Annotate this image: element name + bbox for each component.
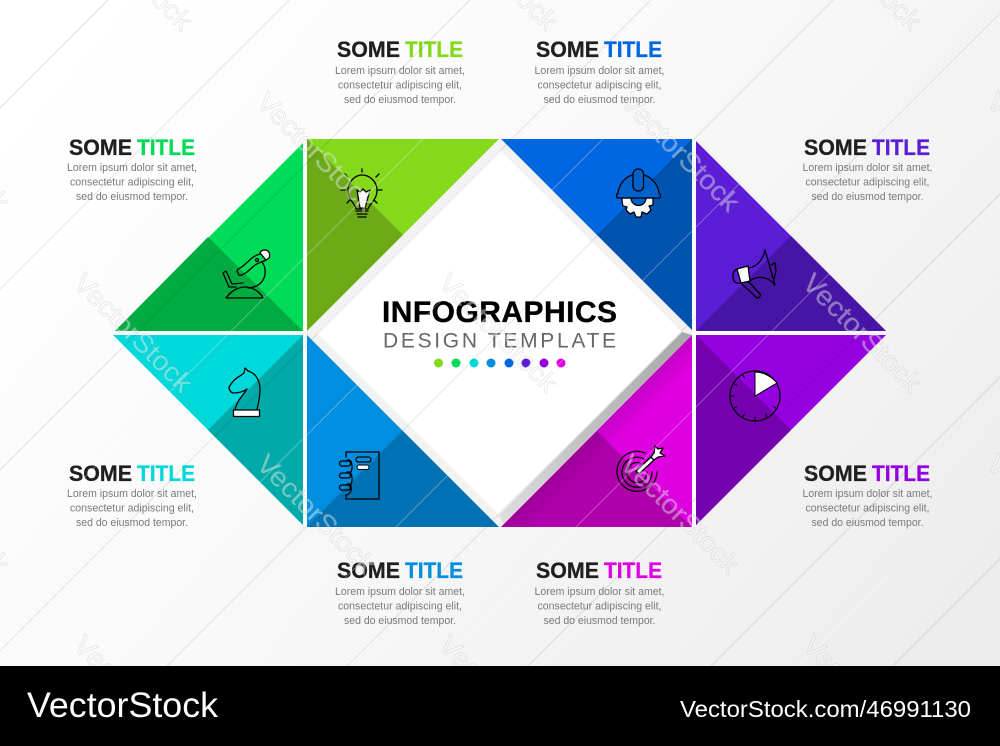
text: lime title: SOME [337, 37, 400, 62]
icon: megaphone [733, 250, 776, 298]
watermark text: VectorStock [433, 268, 564, 399]
text: magenta title: TITLE [604, 558, 662, 583]
text: lime title: sed do eiusmod tempor. [344, 94, 456, 106]
text: violet title: SOME [804, 461, 867, 486]
text: magenta title [534, 558, 665, 627]
text: magenta title: Lorem ipsum dolor sit amet, [534, 586, 665, 598]
text: sky blue title: SOME [337, 558, 400, 583]
text: green title: Lorem ipsum dolor sit amet, [67, 162, 197, 174]
panel: sky blue triangle [307, 335, 499, 527]
text: teal title: Lorem ipsum dolor sit amet, [67, 488, 197, 500]
text: magenta title: SOME [536, 558, 599, 583]
text: green title: consectetur adipiscing elit, [70, 176, 194, 188]
text: green title: TITLE [137, 135, 195, 160]
watermark text: VectorStock [615, 449, 746, 580]
text: indigo title [802, 135, 933, 203]
icon: chess knight [229, 368, 260, 416]
text: violet title: sed do eiusmod tempor. [812, 517, 924, 529]
text: teal title: consectetur adipiscing elit, [70, 502, 194, 514]
text: teal title: SOME [69, 461, 132, 486]
text: violet title: consectetur adipiscing elit, [806, 502, 930, 514]
text: sky blue title: Lorem ipsum dolor sit amet, [335, 586, 465, 598]
watermark text: VectorStock [797, 268, 928, 399]
centre heading [382, 296, 617, 352]
text: violet title [802, 461, 933, 529]
colour dots [434, 358, 566, 368]
panel: indigo triangle [696, 141, 886, 331]
text: sky blue title: sed do eiusmod tempor. [344, 615, 456, 627]
text: royal blue title: TITLE [604, 37, 662, 62]
panel: royal blue triangle [501, 139, 692, 331]
text: magenta title: consectetur adipiscing elit, [538, 600, 662, 612]
icon: microscope [223, 250, 270, 298]
watermark text: VectorStock [615, 87, 746, 218]
icon: light bulb [341, 169, 382, 217]
footer bar [0, 666, 1000, 746]
text: magenta title: sed do eiusmod tempor. [544, 615, 656, 627]
centre heading: INFOGRAPHICS [382, 296, 617, 329]
text: lime title [335, 37, 465, 106]
text: royal blue title: Lorem ipsum dolor sit amet, [534, 65, 665, 77]
footer bar: VectorStock.com/46991130 [680, 696, 971, 722]
icon: target with dart [617, 446, 665, 491]
text: sky blue title: TITLE [405, 558, 463, 583]
text: lime title: consectetur adipiscing elit, [338, 80, 462, 92]
text: lime title: Lorem ipsum dolor sit amet, [335, 65, 465, 77]
text: indigo title: Lorem ipsum dolor sit amet, [802, 162, 933, 174]
text: royal blue title: sed do eiusmod tempor. [544, 94, 656, 106]
panel: teal triangle [113, 335, 303, 525]
text: royal blue title: consectetur adipiscing elit, [538, 80, 662, 92]
text: violet title: TITLE [872, 461, 930, 486]
text: teal title: TITLE [137, 461, 195, 486]
footer bar: VectorStock [27, 686, 219, 725]
white cross gaps [113, 139, 886, 527]
icon: clock with pie slice [730, 371, 780, 421]
text: green title: SOME [69, 135, 132, 160]
panel: lime triangle [307, 139, 499, 331]
watermark text: VectorStock [68, 268, 199, 399]
centre heading: DESIGN TEMPLATE [383, 330, 616, 352]
text: teal title [67, 461, 197, 529]
text: sky blue title: consectetur adipiscing elit, [338, 600, 462, 612]
text: royal blue title: SOME [536, 37, 599, 62]
text: indigo title: TITLE [872, 135, 930, 160]
text: lime title: TITLE [405, 37, 463, 62]
text: green title: sed do eiusmod tempor. [76, 191, 188, 203]
icon: spiral notebook [340, 452, 379, 499]
panel: magenta triangle [501, 335, 692, 527]
text: indigo title: consectetur adipiscing elit, [806, 176, 930, 188]
centre diamond [305, 138, 694, 527]
panel: green triangle [115, 143, 303, 331]
text: indigo title: SOME [804, 135, 867, 160]
text: indigo title: sed do eiusmod tempor. [812, 191, 924, 203]
text: sky blue title [335, 558, 465, 627]
text: violet title: Lorem ipsum dolor sit amet, [802, 488, 933, 500]
text: royal blue title [534, 37, 665, 106]
panel: violet triangle [696, 335, 886, 525]
watermark text: VectorStock [251, 449, 382, 580]
icon: hard hat with gear [616, 169, 660, 217]
text: green title [67, 135, 197, 203]
watermark text: VectorStock [251, 87, 382, 218]
text: teal title: sed do eiusmod tempor. [76, 517, 188, 529]
